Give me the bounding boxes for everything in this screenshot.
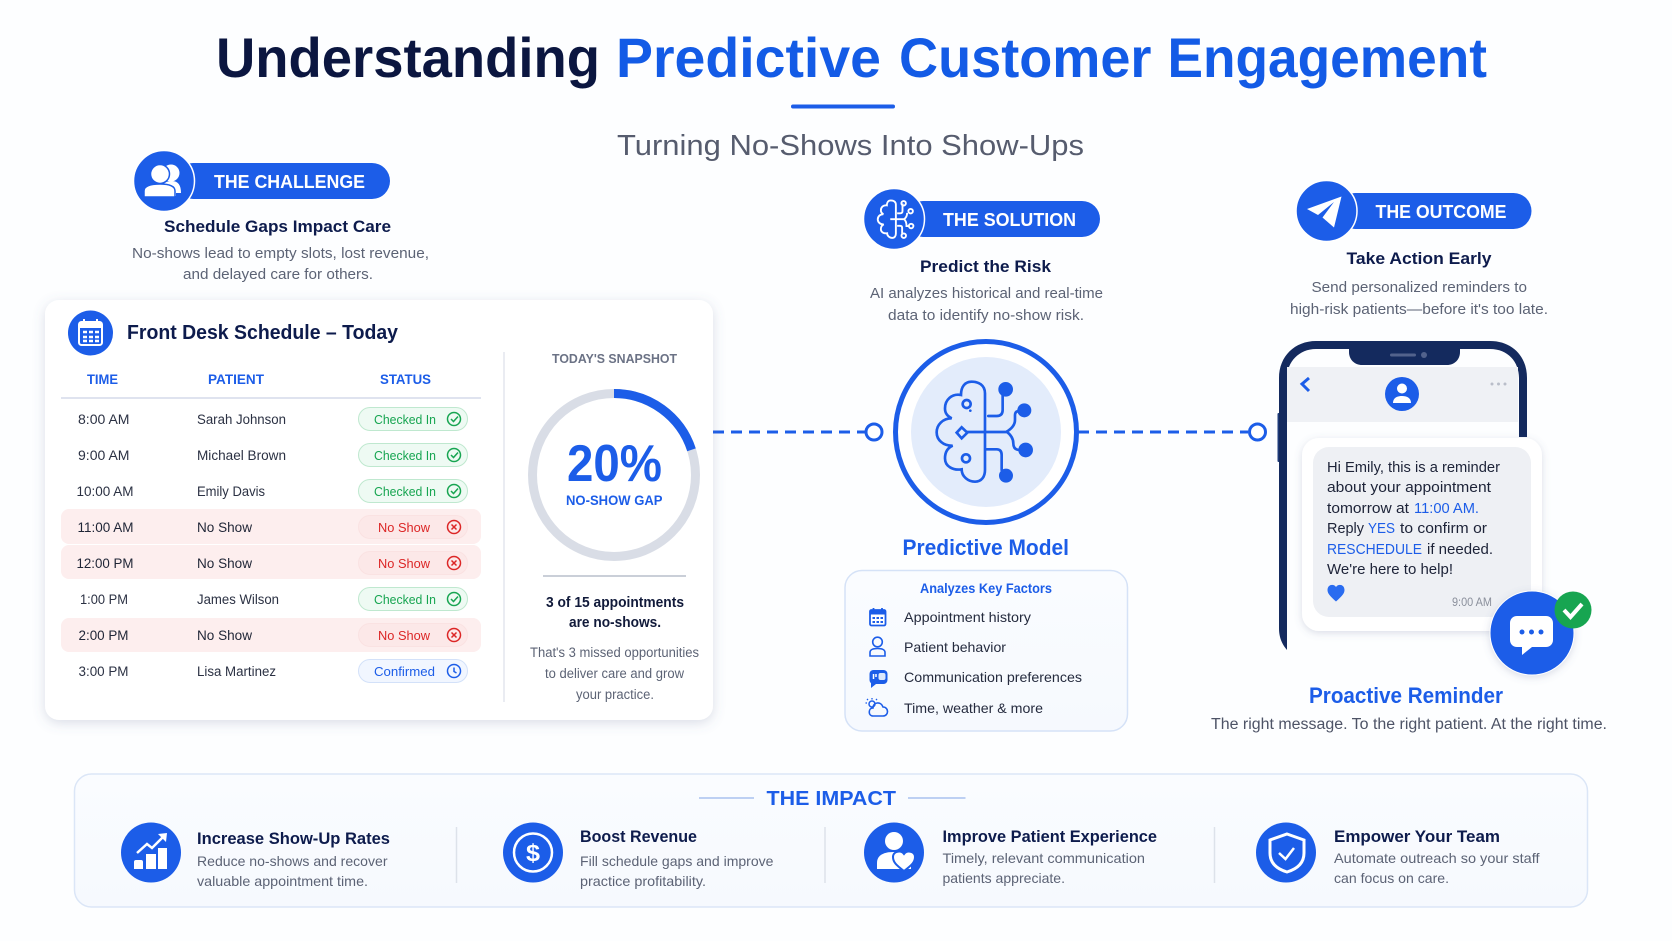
snapshot label: TODAY'S SNAPSHOT [552,351,677,366]
proactive reminder label: Proactive Reminder [1309,683,1503,708]
challenge badge [134,150,390,212]
row: 9:00 AM: Checked In [374,448,436,463]
connector: model to phone [1078,424,1266,440]
impact: empower your team: can focus on care. [1334,870,1449,886]
impact: improve patient experience [864,822,1157,886]
solution heading: Predict the Risk [920,257,1052,276]
factor: patient behavior: Patient behavior [904,639,1006,655]
message card: about your appointment [1327,480,1491,496]
impact: increase show-up rates: Increase Show-Up Rates [197,829,390,848]
impact: improve patient experience: Timely, relevant communication [942,850,1145,866]
message card: Hi Emily, this is a reminder [1327,460,1500,476]
title underline [791,104,895,108]
panel: analyzes key factors: Analyzes Key Factors [920,581,1052,596]
outcome badge [1296,180,1532,242]
solution description: AI analyzes historical and real-time [870,285,1103,302]
impact: boost revenue: practice profitability. [580,873,706,889]
message card: tomorrow at [1327,501,1409,517]
panel: the outcome [1211,180,1607,733]
outcome description: high-risk patients—before it's too late. [1290,301,1548,318]
message card: Reply [1327,521,1365,537]
contact avatar [1385,377,1419,411]
panel: the solution [845,188,1128,731]
table header: TIME [87,372,118,387]
factor: appointment history: Appointment history [904,609,1031,625]
message card: We're here to help! [1327,562,1453,578]
solution badge [864,188,1100,250]
challenge description: No-shows lead to empty slots, lost revenue, [132,245,429,262]
snapshot description: your practice. [576,687,654,702]
panel: the impact [74,774,1588,907]
snapshot takeaway: 3 of 15 appointments [546,595,684,611]
donut chart: 20% no-show gap: NO-SHOW GAP [566,493,662,508]
row: 11:00 AM no show: No Show [197,520,252,535]
row: 3:00 PM: Lisa Martinez [197,664,276,679]
impact: boost revenue [503,822,774,889]
proactive reminder tagline: The right message. To the right patient. At the right time. [1211,716,1607,733]
icon: chat bubble with check [1490,591,1592,675]
row: 11:00 AM no show: No Show [378,520,431,535]
impact: increase show-up rates: Reduce no-shows and recover [197,853,388,869]
impact: boost revenue: Fill schedule gaps and improve [580,853,774,869]
outcome heading: Take Action Early [1346,249,1492,268]
schedule heading: Front Desk Schedule – Today [127,322,399,344]
row: 1:00 PM: James Wilson [197,592,279,607]
impact: increase show-up rates: valuable appointment time. [197,873,368,889]
row: 11:00 AM no show [61,509,481,544]
icon: patient with heart [864,822,924,882]
panel: front desk schedule [45,300,713,720]
connector: schedule to model [713,424,882,440]
message card: YES [1368,521,1395,537]
subtitle: Turning No-Shows Into Show-Ups [617,130,1084,162]
panel: the challenge [132,150,429,283]
row: 12:00 PM no show: No Show [197,556,252,571]
message card: 9:00 AM [1452,597,1492,609]
factor: communication preferences [870,669,1082,688]
row: 10:00 AM: Checked In [374,484,436,499]
impact: empower your team: Empower Your Team [1334,827,1500,846]
factor: communication preferences: Communication preferences [904,669,1082,685]
row: 10:00 AM: Emily Davis [197,484,265,499]
snapshot description [530,645,699,702]
outcome badge: THE OUTCOME [1376,202,1506,222]
message card: 11:00 AM. [1414,501,1479,517]
challenge badge: THE CHALLENGE [214,172,365,192]
table header: STATUS [380,372,431,387]
factor: time, weather and more: Time, weather & more [904,700,1043,716]
row: 9:00 AM: Michael Brown [197,448,286,463]
impact: improve patient experience: patients appreciate. [942,870,1065,886]
row: 8:00 AM: Sarah Johnson [197,412,286,427]
message card: if needed. [1427,542,1493,558]
card background [45,300,713,720]
impact: boost revenue: Boost Revenue [580,827,697,846]
title [216,26,1487,89]
factor: patient behavior [870,637,1006,656]
donut chart: 20% no-show gap [532,394,696,556]
impact: empower your team [1256,822,1540,886]
outcome description [1290,279,1548,318]
row: 12:00 PM no show: 12:00 PM [76,556,134,571]
icon: dollar coin [503,822,563,882]
row: 1:00 PM [80,588,468,610]
impact: increase show-up rates [121,822,390,889]
row: 3:00 PM: 3:00 PM [78,664,128,679]
row: 11:00 AM no show: 11:00 AM [78,520,134,535]
row: 8:00 AM: 8:00 AM [78,412,130,427]
icon: predictive model brain [896,342,1076,522]
impact: empower your team: Automate outreach so your staff [1334,850,1540,866]
solution badge: THE SOLUTION [943,210,1076,230]
row: 1:00 PM: 1:00 PM [80,592,128,607]
panel: analyzes key factors [845,570,1128,731]
icon: calendar [68,310,113,356]
solution description [870,285,1103,324]
snapshot description: to deliver care and grow [545,666,684,681]
factor: time, weather and more [866,698,1043,716]
row: 2:00 PM no show: No Show [378,628,431,643]
snapshot takeaway [546,595,684,631]
row: 10:00 AM: 10:00 AM [76,484,134,499]
panel: today's snapshot [530,351,699,702]
challenge description [132,245,429,283]
icon: rising bar chart [121,822,181,882]
row: 12:00 PM no show [61,545,481,579]
impact: improve patient experience: Improve Patient Experience [942,827,1157,846]
row: 2:00 PM no show: 2:00 PM [78,628,128,643]
row: 10:00 AM [76,480,468,502]
message card: to confirm or [1400,521,1487,537]
icon: dollar coin: $ [526,840,541,867]
row: 9:00 AM [78,444,468,466]
phone mockup [1278,341,1527,650]
impact heading: THE IMPACT [766,788,896,810]
row: 2:00 PM no show [61,618,481,652]
snapshot description: That's 3 missed opportunities [530,645,699,660]
row: 2:00 PM no show: No Show [197,628,252,643]
message card: RESCHEDULE [1327,542,1422,558]
outcome description: Send personalized reminders to [1312,279,1527,296]
challenge description: and delayed care for others. [183,266,373,283]
challenge heading: Schedule Gaps Impact Care [164,217,391,236]
title: Predictive [616,26,881,89]
row: 8:00 AM [78,408,468,430]
table header [61,372,481,398]
title: Customer [899,26,1152,89]
icon: shield with check [1256,822,1316,882]
predictive model label: Predictive Model [902,535,1069,560]
message card [1302,438,1542,631]
row: 12:00 PM no show: No Show [378,556,431,571]
snapshot takeaway: are no-shows. [569,615,661,631]
row: 1:00 PM: Checked In [374,592,436,607]
row: 3:00 PM [78,660,468,682]
title: Engagement [1168,26,1487,89]
row: 8:00 AM: Checked In [374,412,436,427]
title: Understanding [216,26,600,89]
donut chart: 20% no-show gap: 20% [567,435,662,493]
table header: PATIENT [208,372,265,387]
row: 3:00 PM: Confirmed [374,664,435,679]
row: 9:00 AM: 9:00 AM [78,448,130,463]
solution description: data to identify no-show risk. [888,307,1084,324]
